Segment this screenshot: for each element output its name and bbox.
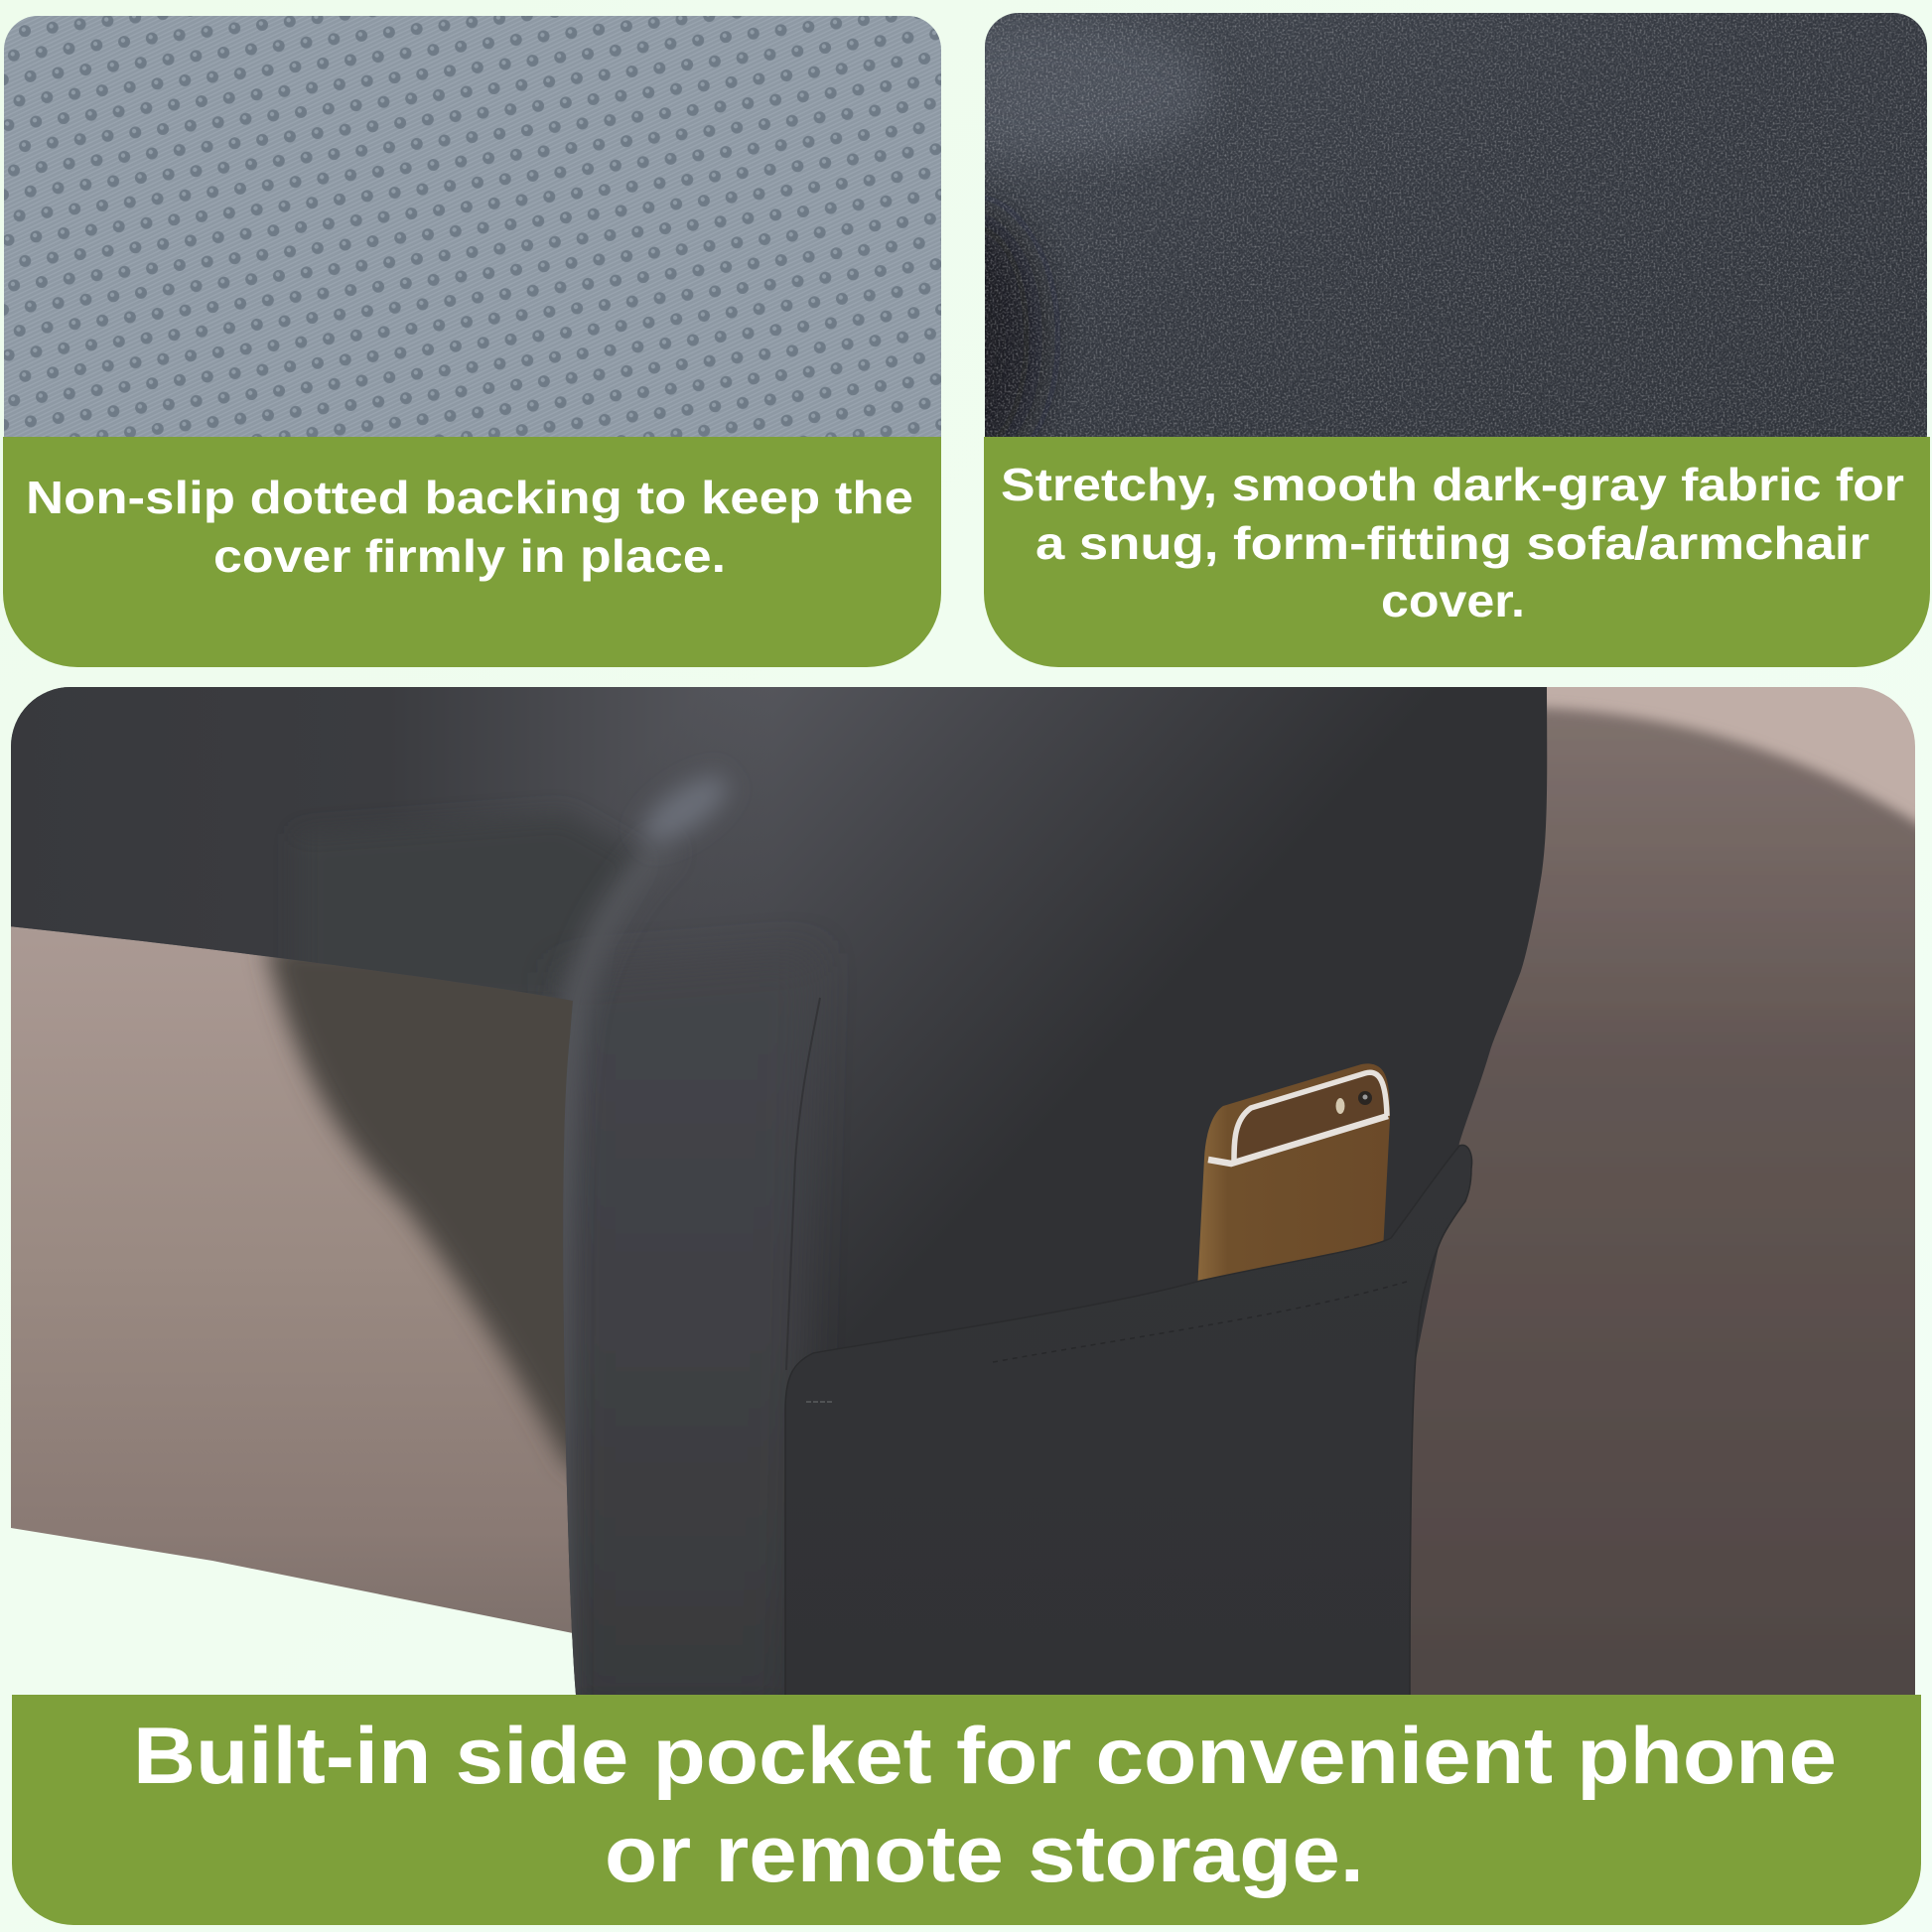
caption panel: built-in side pocket: or remote storage. (605, 1810, 1364, 1899)
wall: left taupe area with shadow (11, 926, 573, 1633)
caption panel: non-slip backing: Non-slip dotted backing to keep the (26, 472, 913, 523)
panel: non-slip dotted backing (0, 10, 953, 667)
photo: dark grey fabric texture (985, 13, 1927, 437)
caption panel: stretch fabric: cover. (1381, 575, 1525, 626)
panel: sofa armrest with side pocket (0, 675, 1931, 1925)
panel: dark-gray stretch fabric (894, 5, 1932, 667)
icon: gold phone in pocket (1197, 1063, 1390, 1291)
caption panel: stretch fabric: Stretchy, smooth dark-gray fabric for (1001, 459, 1904, 510)
caption panel: stretch fabric (984, 437, 1930, 667)
caption panel: non-slip backing: cover firmly in place. (213, 530, 726, 582)
caption panel: stretch fabric: a snug, form-fitting sofa/armchair (1035, 517, 1869, 569)
caption panel: built-in side pocket: Built-in side pocket for convenient phone (133, 1712, 1837, 1801)
pocket on side of arm (785, 1145, 1471, 1708)
caption panel: built-in side pocket (12, 1695, 1921, 1925)
photo: dotted grey backing (0, 10, 953, 447)
wall: right taupe area with arc shadow (1410, 687, 1915, 1695)
photo: sofa arm scene (0, 675, 1931, 1727)
caption panel: non-slip backing (3, 437, 941, 667)
sofa body in dark fabric (0, 675, 1588, 1718)
